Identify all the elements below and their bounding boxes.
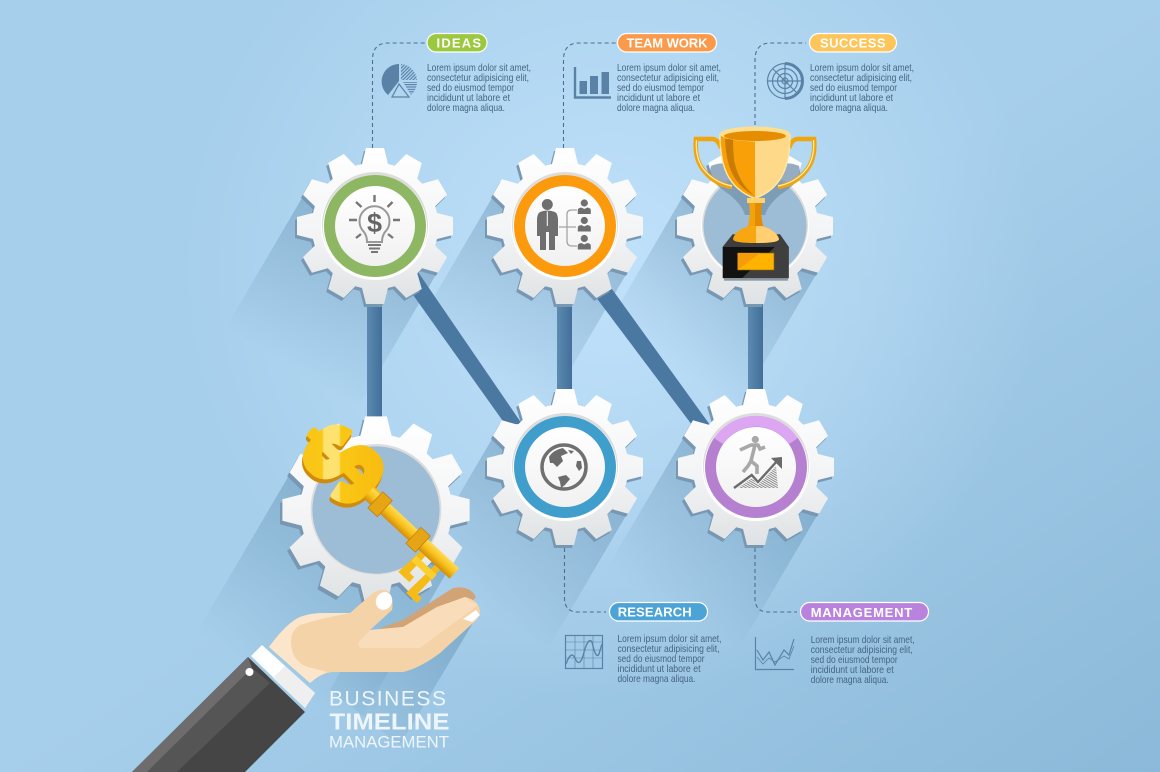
label pill xyxy=(618,34,716,52)
description: sed do eiusmod tempor xyxy=(617,82,704,94)
description: consectetur adipisicing elit, xyxy=(427,72,529,84)
info: team work xyxy=(575,34,721,114)
description: dolore magna aliqua. xyxy=(617,102,695,114)
info: management xyxy=(756,602,928,686)
label pill xyxy=(800,602,928,621)
description: dolore magna aliqua. xyxy=(618,673,696,685)
dollar head extrusion: $ xyxy=(277,403,407,533)
info: ideas xyxy=(382,34,531,114)
palm far side xyxy=(370,587,476,640)
description: consectetur adipisicing elit, xyxy=(618,643,720,655)
description: dolore magna aliqua. xyxy=(810,102,888,114)
purple ring xyxy=(705,416,807,518)
description: consectetur adipisicing elit, xyxy=(811,644,913,656)
trophy xyxy=(696,126,814,281)
icon: globe xyxy=(542,445,586,489)
panel: team work gear xyxy=(485,148,643,307)
info: research xyxy=(566,602,722,685)
right handle xyxy=(778,139,814,187)
title: BUSINESS xyxy=(329,688,446,710)
description: Lorem ipsum dolor sit amet, xyxy=(618,633,722,645)
info: success xyxy=(768,34,914,114)
cuff xyxy=(251,645,315,708)
label pill: SUCCESS xyxy=(820,36,886,50)
long shadows of gears xyxy=(191,186,822,745)
description: sed do eiusmod tempor xyxy=(427,82,514,94)
label pill: IDEAS xyxy=(436,36,481,50)
cup stem xyxy=(747,198,765,228)
icon: dollar light bulb xyxy=(349,195,400,252)
icon: bar chart xyxy=(575,67,611,98)
finger nail xyxy=(463,610,480,622)
plate xyxy=(738,253,774,270)
title: TIMELINE xyxy=(330,708,450,734)
description: consectetur adipisicing elit, xyxy=(617,72,719,84)
plinth xyxy=(723,234,789,281)
description: incididunt ut labore et xyxy=(617,92,700,104)
icon: pie chart xyxy=(382,64,417,97)
key shaft and teeth xyxy=(336,485,462,608)
description: dolore magna aliqua. xyxy=(427,102,505,114)
description: incididunt ut labore et xyxy=(810,92,893,104)
icon: runner on rising arrow xyxy=(734,436,782,488)
icon: stock lines xyxy=(756,637,794,670)
sleeve xyxy=(132,645,315,772)
label pill: RESEARCH xyxy=(618,605,692,620)
gear hole xyxy=(704,174,806,278)
panel: key gear xyxy=(280,416,470,607)
connector bars xyxy=(367,272,763,425)
icon: dollar light bulb: $ xyxy=(367,208,382,238)
blue ring xyxy=(514,416,616,518)
description: consectetur adipisicing elit, xyxy=(810,72,912,84)
description: Lorem ipsum dolor sit amet, xyxy=(617,62,721,74)
label pill xyxy=(610,602,708,621)
description: incididunt ut labore et xyxy=(427,92,510,104)
dollar head: $ xyxy=(278,399,408,529)
hand shape xyxy=(269,590,480,683)
description: sed do eiusmod tempor xyxy=(810,82,897,94)
panel: management gear xyxy=(676,389,834,548)
label pill: MANAGEMENT xyxy=(811,605,912,620)
description: sed do eiusmod tempor xyxy=(618,653,705,665)
cup base xyxy=(733,226,779,243)
cuff button xyxy=(246,668,254,676)
description: sed do eiusmod tempor xyxy=(811,654,898,666)
title: MANAGEMENT xyxy=(329,733,449,751)
description: incididunt ut labore et xyxy=(618,663,701,675)
label pill xyxy=(810,34,896,52)
panel: ideas gear xyxy=(295,148,453,307)
orange ring xyxy=(514,175,616,277)
green ring xyxy=(324,175,426,277)
icon: manager and team xyxy=(537,199,591,250)
dashed leader lines xyxy=(372,43,806,612)
left handle xyxy=(696,139,732,187)
icon: radar target xyxy=(768,64,802,98)
icon: line graph with grid xyxy=(566,636,602,668)
description: dolore magna aliqua. xyxy=(811,674,889,686)
trophy shadow xyxy=(709,163,801,215)
title xyxy=(329,688,450,751)
key xyxy=(277,399,462,608)
hand xyxy=(269,587,480,683)
description: Lorem ipsum dolor sit amet, xyxy=(811,634,915,646)
label pill xyxy=(427,34,487,52)
panel: success gear xyxy=(675,148,833,307)
description: Lorem ipsum dolor sit amet, xyxy=(810,62,914,74)
cup bowl xyxy=(720,126,790,198)
thumb nail xyxy=(373,589,395,613)
description: incididunt ut labore et xyxy=(811,664,894,676)
gear hole xyxy=(312,446,440,574)
description: Lorem ipsum dolor sit amet, xyxy=(427,62,531,74)
panel: research gear xyxy=(485,389,643,548)
label pill: TEAM WORK xyxy=(626,36,708,50)
